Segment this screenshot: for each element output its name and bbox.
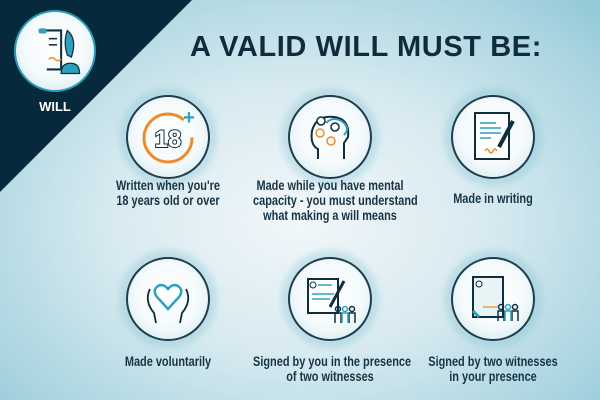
icon: heart hands bbox=[126, 257, 210, 341]
label bbox=[253, 178, 418, 223]
label: what making a will means bbox=[263, 208, 397, 223]
icon: 18+: 18 bbox=[155, 126, 181, 153]
icon: head bbox=[288, 95, 372, 179]
icon: document with witnesses bbox=[451, 257, 535, 341]
label bbox=[116, 178, 220, 208]
label: 18 years old or over bbox=[116, 193, 220, 208]
label: Made while you have mental bbox=[256, 178, 404, 193]
item: signed by you bbox=[253, 248, 411, 384]
label: Signed by you in the presence bbox=[253, 354, 411, 369]
label: Signed by two witnesses bbox=[428, 354, 558, 369]
icon: document bbox=[451, 95, 535, 179]
label: Made in writing bbox=[453, 191, 533, 206]
label: Written when you're bbox=[116, 178, 220, 193]
item: signed by witnesses bbox=[428, 248, 558, 384]
icon: 18+ bbox=[126, 95, 210, 179]
label bbox=[428, 354, 558, 384]
will badge icon bbox=[14, 10, 96, 92]
label: in your presence bbox=[449, 369, 537, 384]
will label: WILL bbox=[39, 99, 71, 114]
label: capacity - you must understand bbox=[253, 193, 418, 208]
label: of two witnesses bbox=[286, 369, 374, 384]
item: 18 years bbox=[116, 86, 220, 208]
icon: signing with witnesses bbox=[288, 257, 372, 341]
item: writing bbox=[442, 87, 543, 206]
item: voluntarily bbox=[118, 248, 219, 369]
label: Made voluntarily bbox=[125, 354, 211, 369]
icon: 18+: + bbox=[183, 107, 195, 129]
item: mental capacity bbox=[253, 86, 418, 223]
label bbox=[253, 354, 411, 384]
title: A VALID WILL MUST BE: bbox=[190, 31, 542, 63]
